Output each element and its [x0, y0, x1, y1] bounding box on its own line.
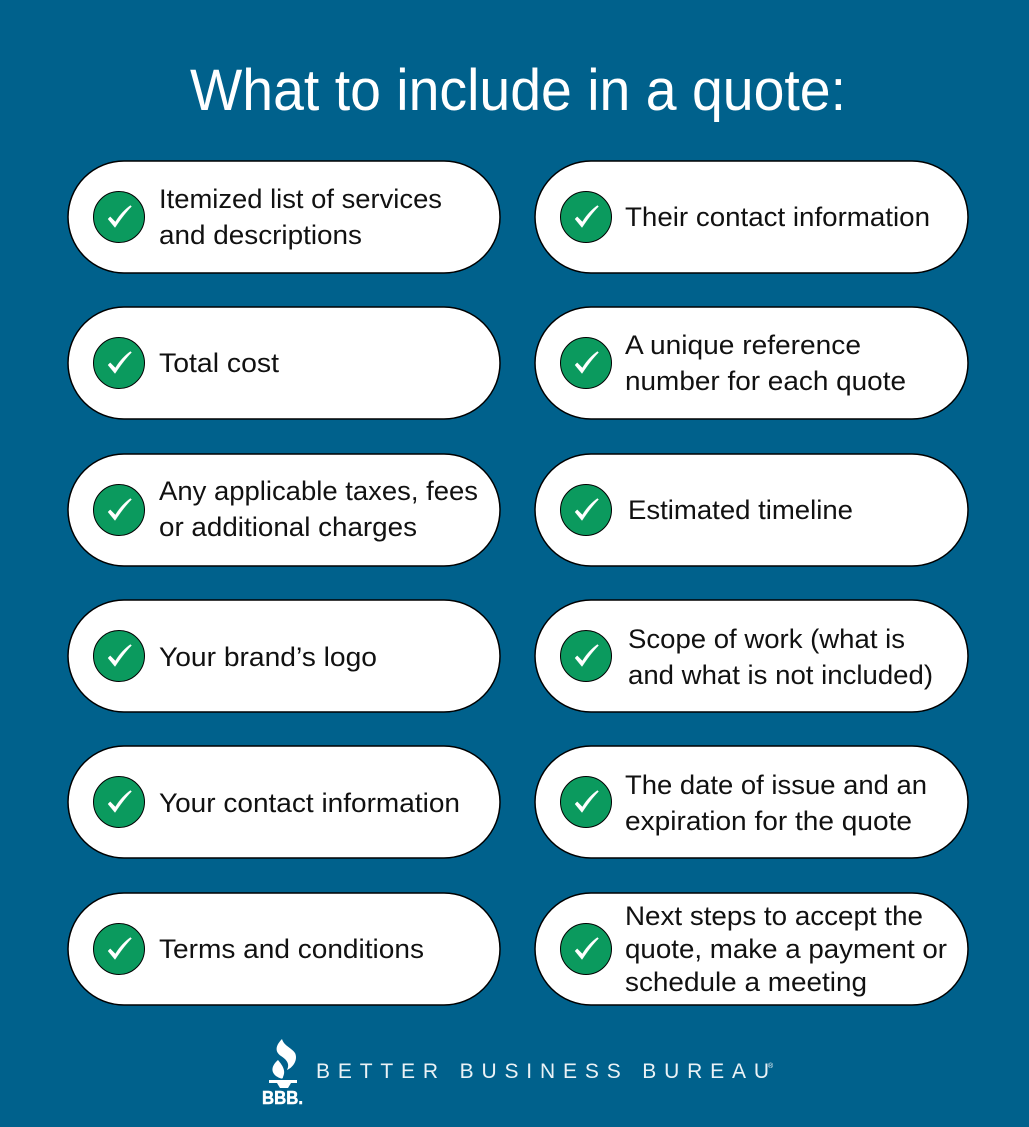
item: scope of work — [535, 600, 968, 712]
item: scope of work: and what is not included) — [628, 660, 933, 690]
item: their contact information: Their contact information — [625, 202, 930, 232]
item: scope of work: Scope of work (what is — [628, 624, 905, 654]
item: taxes and fees — [68, 454, 500, 566]
item: unique reference number — [535, 307, 968, 419]
item: itemized list: Itemized list of services — [159, 184, 442, 214]
item: next steps: schedule a meeting — [625, 967, 867, 997]
item: estimated timeline — [535, 454, 968, 566]
item: date of issue — [535, 746, 968, 858]
item: next steps: Next steps to accept the — [625, 901, 923, 931]
item: terms and conditions — [68, 893, 500, 1005]
item: itemized list: and descriptions — [159, 220, 362, 250]
item: itemized list — [68, 161, 500, 273]
logo wordmark: BETTER BUSINESS BUREAU — [316, 1060, 769, 1083]
footer logo — [262, 1039, 774, 1108]
item: taxes and fees: Any applicable taxes, fees — [159, 476, 478, 506]
item: your contact information — [68, 746, 500, 858]
registered mark: ® — [768, 1062, 774, 1070]
icon: BBB torch — [262, 1039, 303, 1108]
item: your contact information: Your contact information — [159, 788, 460, 818]
item: brand logo: Your brand’s logo — [159, 642, 377, 672]
item: date of issue: expiration for the quote — [625, 806, 912, 836]
item: taxes and fees: or additional charges — [159, 512, 417, 542]
item: unique reference number: A unique reference — [625, 330, 861, 360]
item: total cost: Total cost — [159, 348, 280, 378]
item: terms and conditions: Terms and conditions — [159, 934, 424, 964]
item: date of issue: The date of issue and an — [625, 770, 927, 800]
item: their contact information — [535, 161, 968, 273]
item: estimated timeline: Estimated timeline — [628, 495, 853, 525]
item: next steps — [535, 893, 968, 1005]
icon: BBB torch: BBB. — [262, 1088, 303, 1108]
item: unique reference number: number for each quote — [625, 366, 906, 396]
title: What to include in a quote: — [190, 58, 846, 123]
item: total cost — [68, 307, 500, 419]
item: brand logo — [68, 600, 500, 712]
item: next steps: quote, make a payment or — [625, 934, 947, 964]
